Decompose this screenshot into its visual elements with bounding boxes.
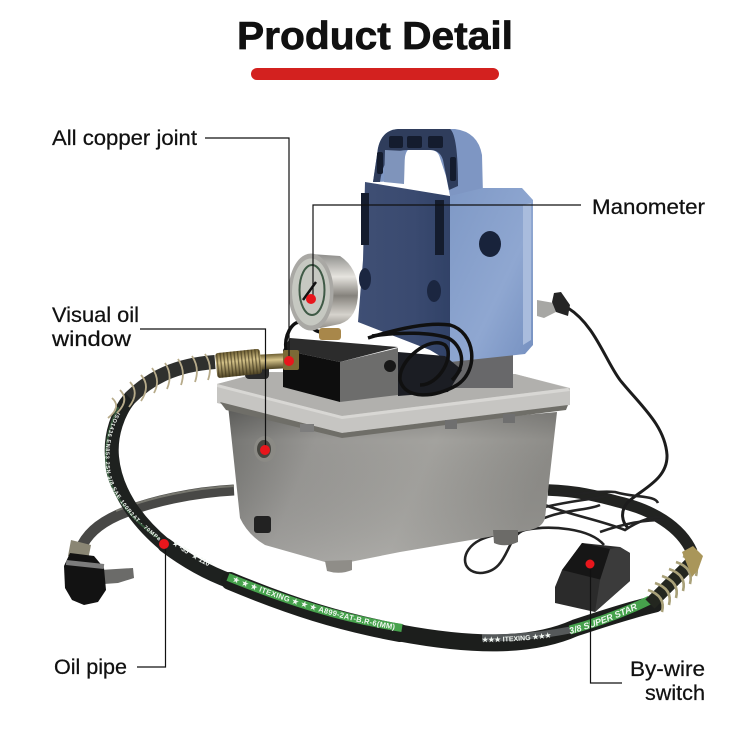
pump reservoir xyxy=(217,372,570,573)
wire bundle shadow xyxy=(398,352,462,396)
manometer xyxy=(288,254,358,340)
dark face xyxy=(358,182,450,362)
by-wire switch xyxy=(555,543,630,612)
plate tabs xyxy=(300,424,314,432)
switch wires xyxy=(465,492,664,573)
front oil hose: 3/8 SUPER STAR xyxy=(570,604,638,634)
label: oil pipe: Oil pipe xyxy=(54,656,127,679)
green print bands xyxy=(228,577,402,628)
front oil hose: ★ -35° ★ 110° xyxy=(172,542,212,566)
title: Product Detail xyxy=(237,15,513,58)
power cord xyxy=(568,308,667,528)
sight window bezel xyxy=(254,436,276,462)
callout dots xyxy=(159,294,594,568)
motor mount xyxy=(445,355,513,388)
label: all copper joint: All copper joint xyxy=(52,127,197,150)
plug xyxy=(537,292,570,318)
hose spring left xyxy=(108,354,215,418)
label: by-wire switch: By-wire xyxy=(630,658,705,681)
light face xyxy=(450,188,533,362)
title underline xyxy=(251,68,499,80)
label: visual oil window: Visual oil xyxy=(52,304,139,327)
valve block xyxy=(283,338,398,402)
pressure port xyxy=(245,365,269,379)
back oil hose with coupling xyxy=(64,486,234,605)
top plate xyxy=(217,372,570,433)
handle xyxy=(373,129,483,196)
feet xyxy=(325,560,352,573)
internal wires xyxy=(286,322,472,395)
brass fitting with spring xyxy=(215,349,299,378)
callout lines xyxy=(137,138,622,683)
label: by-wire switch: switch xyxy=(645,682,705,705)
label: visual oil window: window xyxy=(51,328,132,351)
housing holes xyxy=(479,231,501,257)
motor housing xyxy=(358,129,533,362)
label: manometer: Manometer xyxy=(592,196,705,219)
front oil hose xyxy=(104,392,664,652)
tank body xyxy=(228,405,557,564)
front oil hose: ★★★ ITEXING ★★★ xyxy=(482,632,551,642)
label: by-wire switch xyxy=(630,658,705,705)
drain port xyxy=(254,516,271,533)
hose spring right xyxy=(648,546,703,612)
front oil hose: ★ ★ ★ ITEXING ★ ★ ★ A899-2AT-B.R-6(MM) xyxy=(233,576,395,631)
label: visual oil window xyxy=(51,304,139,351)
right back hose xyxy=(548,490,692,552)
hose print: ISO1436 EN853 2SN 3/8 SAE 100R2AT · 70MPa xyxy=(106,412,160,541)
